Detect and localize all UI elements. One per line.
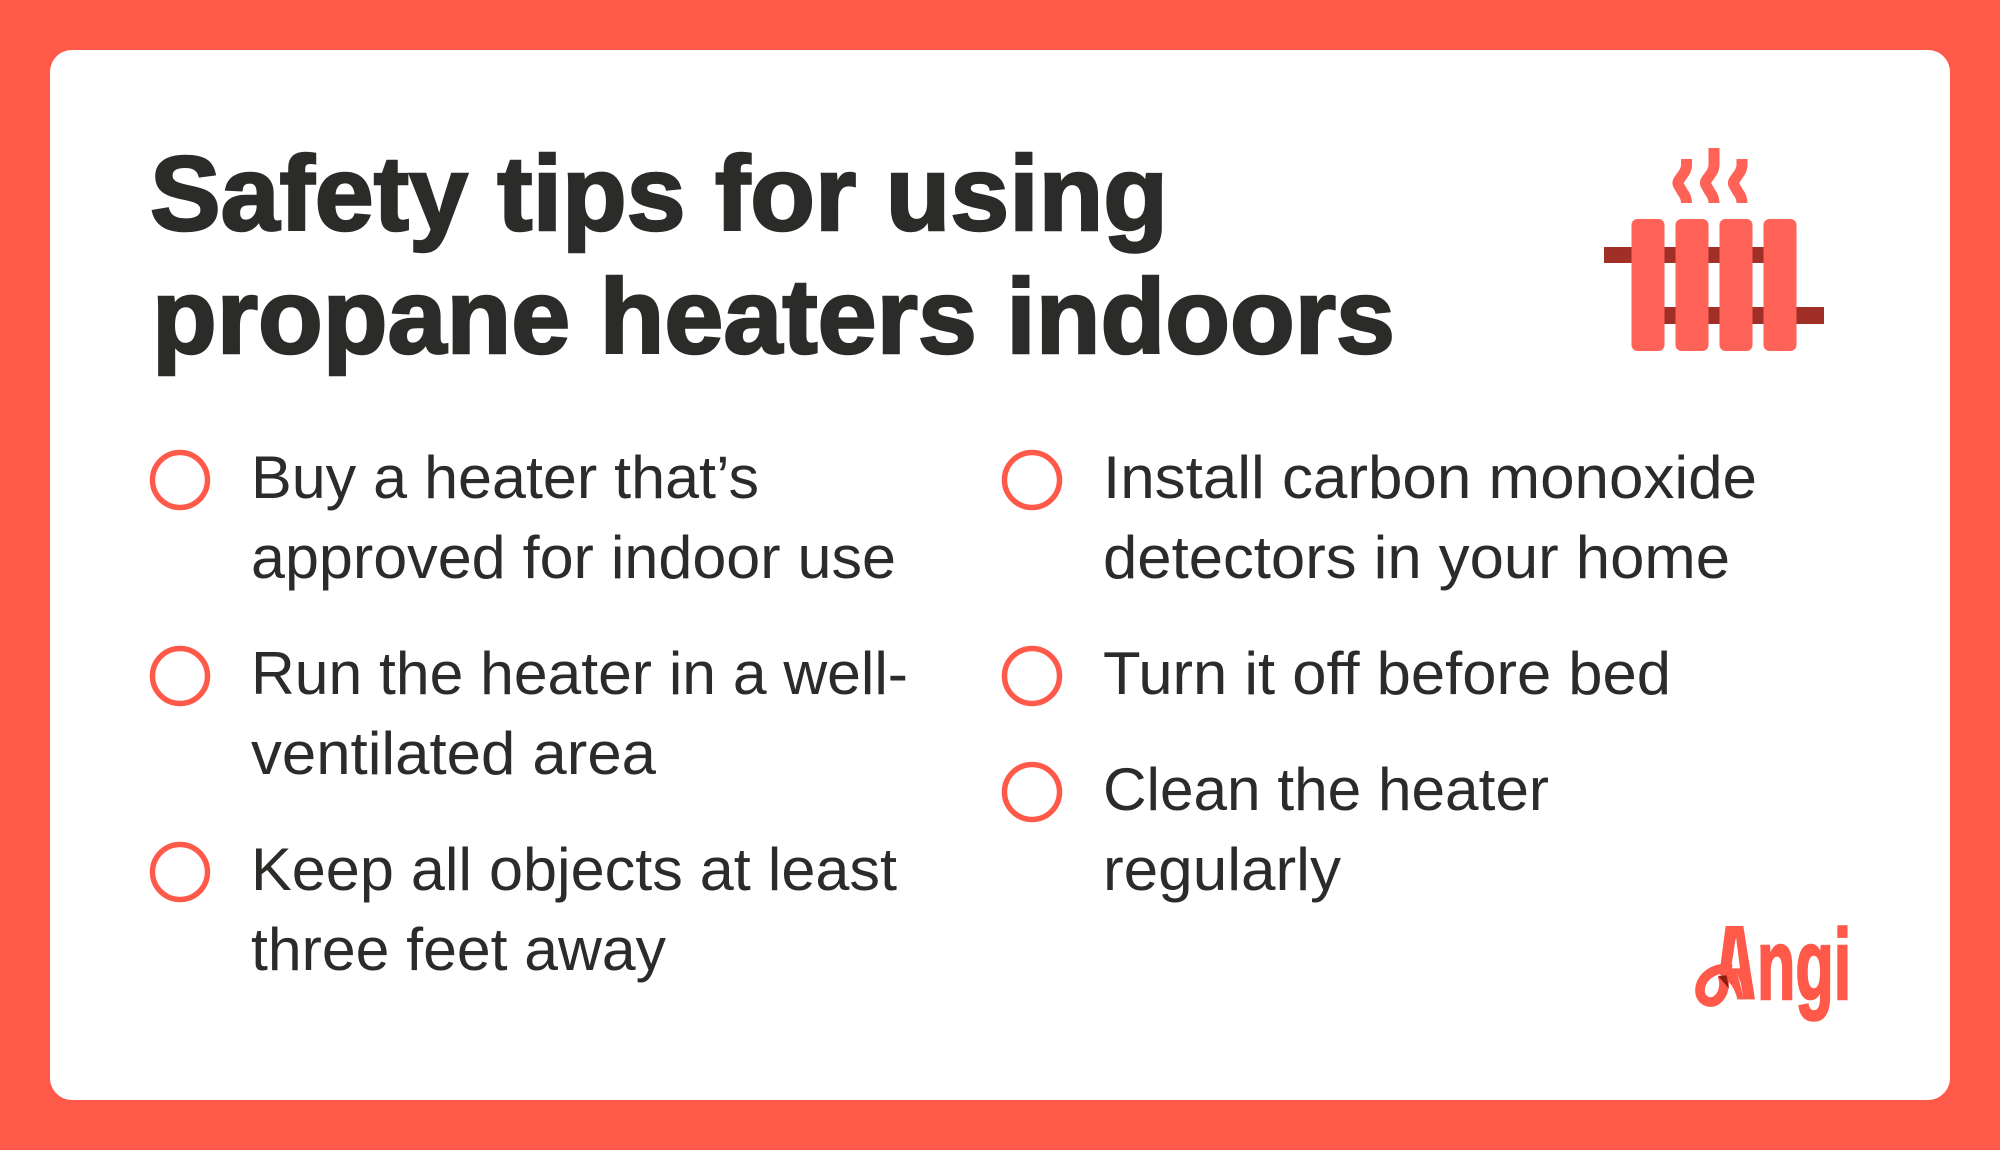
list item: carbon monoxide detectors: detectors in your home [1103,524,1730,591]
list item: ventilation: ventilated area [251,720,657,787]
list item: turn off before bed: Turn it off before bed [1103,640,1671,707]
list item: clean regularly: regularly [1103,836,1341,903]
title [150,135,1395,376]
icon: radiator with steam [1604,148,1824,351]
list item: clearance: Keep all objects at least [251,836,897,903]
logo: Angi [1700,908,1851,1021]
list item: clearance: three feet away [251,916,666,983]
list item: carbon monoxide detectors: Install carbon monoxide [1103,444,1757,511]
logo: Angi: ngi [1757,908,1851,1021]
list item: clearance [152,836,897,983]
title: Safety tips for using [150,135,1168,253]
list item: ventilation [152,640,908,787]
list item: carbon monoxide detectors [1004,444,1757,591]
list item: buy approved heater: Buy a heater that’s [251,444,759,511]
title: propane heaters indoors [152,258,1395,376]
list item: ventilation: Run the heater in a well- [251,640,908,707]
list item: buy approved heater [152,444,896,591]
list item: clean regularly [1004,756,1549,903]
list item: buy approved heater: approved for indoor use [251,524,896,591]
list item: clean regularly: Clean the heater [1103,756,1549,823]
